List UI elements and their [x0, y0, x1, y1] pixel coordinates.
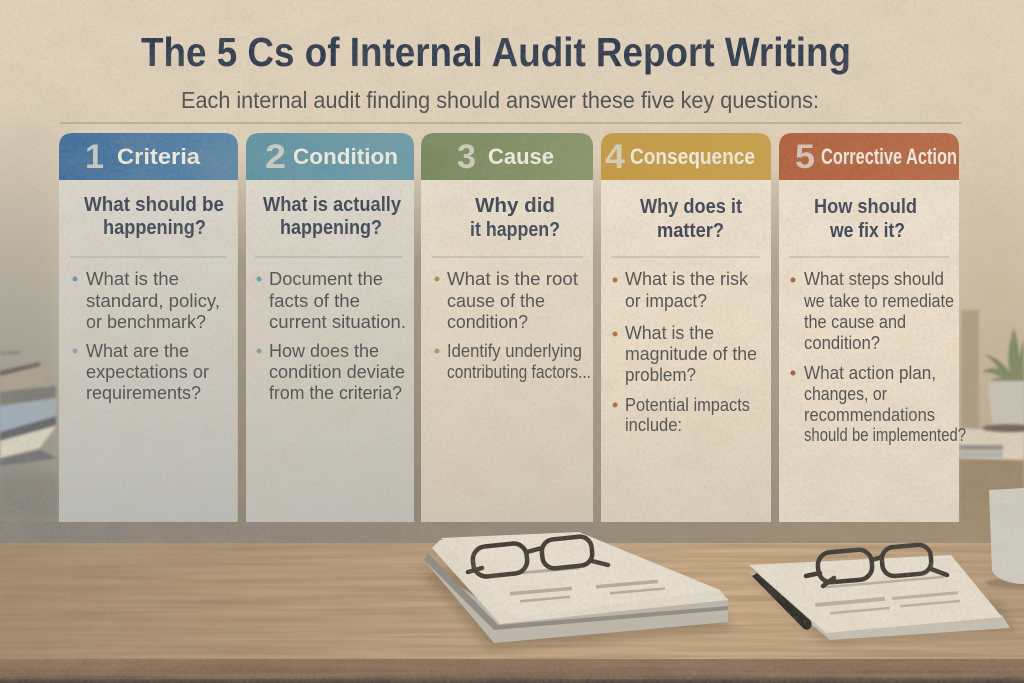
question: What is actually — [263, 194, 402, 216]
bullet list: What is the — [625, 322, 714, 343]
bullet list: contributing factors... — [447, 361, 591, 382]
bullet list — [72, 268, 220, 403]
panel: criteria — [59, 133, 238, 522]
bullet list: changes, or — [804, 383, 887, 404]
header: corrective action: 5 — [795, 138, 815, 176]
bullet list: or impact? — [625, 290, 707, 311]
bullet list: Document the — [269, 268, 383, 289]
bullet list: we take to remediate — [803, 290, 954, 311]
bullet list: Identify underlying — [447, 340, 582, 361]
bullet list: condition deviate — [269, 361, 405, 382]
question — [814, 196, 917, 242]
header: cause: 3 — [457, 138, 476, 176]
question: How should — [814, 196, 917, 218]
bullet list: cause of the — [447, 290, 545, 311]
bullet list: magnitude of the — [625, 343, 757, 364]
question: happening? — [103, 217, 206, 239]
bullet list — [790, 268, 966, 445]
bullet list — [256, 268, 406, 403]
bullet list: What is the — [86, 268, 179, 289]
bullet list: condition? — [447, 311, 528, 332]
panel: cause — [421, 133, 593, 522]
question: happening? — [280, 217, 382, 239]
title: The 5 Cs of Internal Audit Report Writing — [141, 29, 851, 75]
header: cause — [421, 133, 593, 180]
question: Why does it — [640, 196, 742, 218]
header: consequence: 4 — [605, 138, 625, 176]
bullet list: What action plan, — [804, 362, 936, 383]
header: condition: 2 — [265, 138, 286, 176]
question: Why did — [475, 195, 555, 217]
shelf behind panels — [0, 310, 1024, 544]
question — [640, 196, 742, 242]
bullet list: recommendations — [804, 404, 935, 425]
bullet list: How does the — [269, 340, 379, 361]
icon: glasses on right paper — [806, 544, 947, 586]
panel: consequence — [601, 133, 771, 522]
icon: left stack of papers with glasses — [420, 532, 735, 650]
panel: corrective action — [779, 133, 966, 522]
panel: condition — [246, 133, 414, 522]
bullet list: standard, policy, — [86, 290, 220, 311]
bullet list: What steps should — [804, 268, 944, 289]
header: consequence: Consequence — [630, 144, 755, 169]
bullet list: facts of the — [269, 290, 360, 311]
question: it happen? — [470, 219, 560, 241]
icon: coffee mug — [986, 488, 1024, 588]
header: corrective action: Corrective Action — [821, 144, 957, 169]
header: criteria: 1 — [85, 138, 104, 176]
bullet list: Potential impacts — [625, 394, 750, 415]
background wall — [0, 0, 1024, 545]
bullet list — [434, 268, 591, 382]
question — [263, 194, 402, 239]
bullet list: the cause and — [804, 311, 906, 332]
bullet list: condition? — [804, 332, 880, 353]
desk — [0, 543, 1024, 683]
header: criteria — [59, 133, 238, 180]
bullet list: What is the risk — [625, 268, 749, 289]
bullet list: or benchmark? — [86, 311, 206, 332]
icon: pen — [752, 573, 811, 630]
bullet list: What is the root — [447, 268, 578, 289]
bullet list: current situation. — [269, 311, 406, 332]
question: matter? — [657, 220, 724, 242]
header: corrective action — [779, 133, 959, 180]
bullet list: include: — [625, 414, 682, 435]
icon: potted plant on the right — [959, 328, 1024, 458]
header: criteria: Criteria — [117, 144, 201, 169]
bullet list: problem? — [625, 364, 696, 385]
bullet list: from the criteria? — [269, 382, 402, 403]
subtitle: Each internal audit finding should answer these five key questions: — [181, 87, 819, 113]
bullet list: requirements? — [86, 382, 201, 403]
bullet list: should be implemented? — [804, 424, 966, 445]
question: we fix it? — [829, 220, 905, 242]
bullet list: What are the — [86, 340, 189, 361]
bullet list — [612, 268, 757, 435]
header: condition — [246, 133, 414, 180]
question — [84, 194, 224, 239]
header: condition: Condition — [293, 144, 398, 169]
bullet list: expectations or — [86, 361, 209, 382]
header: consequence — [601, 133, 771, 180]
icon: stack of books on the left — [0, 351, 58, 466]
header: cause: Cause — [488, 144, 554, 169]
icon: glasses on left stack — [468, 535, 608, 578]
icon: right paper with glasses and pen — [749, 544, 1015, 645]
question — [470, 195, 560, 241]
question: What should be — [84, 194, 224, 216]
